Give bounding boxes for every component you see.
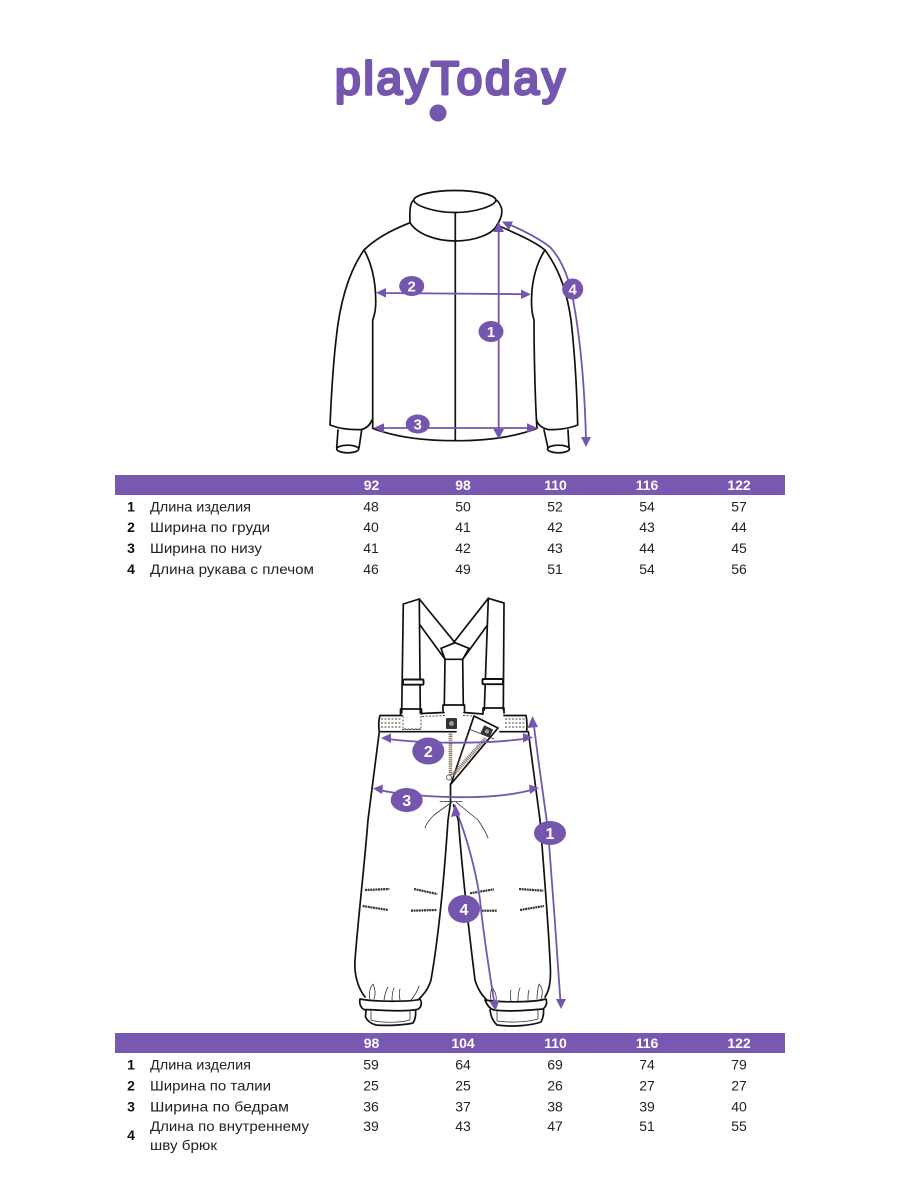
measure 2: waist width: 2: [424, 744, 433, 761]
trousers measurement arrows: [373, 716, 566, 1011]
row 2: Ширина по талии: [150, 1078, 271, 1094]
row 3: [127, 1098, 747, 1114]
row 1: Длина изделия: [150, 1056, 251, 1072]
row 1: 79: [731, 1056, 747, 1072]
row 1: Длина изделия: [150, 498, 251, 514]
measure 3: hip width: [373, 784, 539, 812]
table header: [115, 475, 785, 495]
trouser cuffs: [360, 984, 547, 1026]
row 3: 43: [547, 540, 563, 556]
table: trousers sizes: [115, 1033, 785, 1153]
logo: playToday: playToday: [335, 52, 565, 104]
knee darts: [363, 889, 544, 911]
row 2: 25: [363, 1078, 379, 1094]
row 2: 27: [639, 1078, 655, 1094]
measure 1: garment length: [478, 222, 504, 439]
row 1: 1: [127, 498, 135, 514]
row 4: 39: [363, 1118, 379, 1134]
row 3: 45: [731, 540, 747, 556]
row 3: Ширина по низу: [150, 540, 262, 556]
measure 3: hem width: [374, 414, 538, 434]
zipper and fly: [446, 716, 498, 784]
row 2: 41: [455, 519, 471, 535]
row 1: 54: [639, 498, 655, 514]
row 1: 69: [547, 1056, 563, 1072]
row 4: [127, 1118, 747, 1153]
row 4: 46: [363, 561, 379, 577]
row 4: 43: [455, 1118, 471, 1134]
row 3: 39: [639, 1098, 655, 1114]
row 2: 42: [547, 519, 563, 535]
row 2: 43: [639, 519, 655, 535]
row 3: 36: [363, 1098, 379, 1114]
row 1: 50: [455, 498, 471, 514]
row 1: 74: [639, 1056, 655, 1072]
row 2: 2: [127, 1078, 135, 1094]
table header: 116: [636, 477, 659, 493]
row 1: [127, 498, 747, 514]
table header: 110: [544, 1035, 567, 1051]
table header: 98: [455, 477, 471, 493]
suspenders: [400, 598, 504, 714]
row 3: 40: [731, 1098, 747, 1114]
measure 4: inseam: [448, 804, 500, 1011]
row 2: 26: [547, 1078, 563, 1094]
measure 4: sleeve length: 4: [569, 282, 578, 298]
row 1: 57: [731, 498, 747, 514]
measure 4: inseam: 4: [460, 902, 469, 919]
row 4: 56: [731, 561, 747, 577]
row 4: шву брюк: [150, 1137, 218, 1153]
row 4: 4: [127, 1127, 135, 1143]
waistband: [379, 712, 527, 732]
table header: 116: [636, 1035, 659, 1051]
row 3: 41: [363, 540, 379, 556]
row 4: [127, 561, 747, 577]
row 3: 38: [547, 1098, 563, 1114]
measure 4: sleeve length: [502, 222, 591, 447]
row 1: 48: [363, 498, 379, 514]
row 2: [127, 1078, 747, 1094]
trouser legs: [355, 732, 550, 1000]
measure 2: chest width: 2: [408, 278, 416, 296]
measure 3: hem width: 3: [414, 416, 422, 434]
table header: 104: [451, 1035, 475, 1051]
row 3: 3: [127, 540, 135, 556]
row 1: 59: [363, 1056, 379, 1072]
row 3: 44: [639, 540, 655, 556]
row 2: 27: [731, 1078, 747, 1094]
row 4: 49: [455, 561, 471, 577]
row 3: Ширина по бедрам: [150, 1098, 289, 1114]
table header: [115, 1033, 785, 1053]
table header: 98: [364, 1035, 379, 1051]
measure 1: garment length: 1: [546, 826, 555, 843]
row 3: 37: [455, 1098, 471, 1114]
row 3: 42: [455, 540, 471, 556]
row 2: 44: [731, 519, 747, 535]
measure 2: chest width: [376, 276, 531, 299]
row 4: 54: [639, 561, 655, 577]
jacket measurement arrows: [374, 222, 591, 447]
row 1: [127, 1056, 747, 1072]
measure 3: hip width: 3: [402, 793, 411, 810]
table: jacket sizes: [115, 475, 785, 577]
row 4: Длина рукава с плечом: [150, 561, 314, 577]
row 4: 51: [639, 1118, 655, 1134]
jacket illustration: [330, 190, 578, 453]
row 3: [127, 540, 747, 556]
table header: 122: [727, 1035, 751, 1051]
row 2: 25: [455, 1078, 471, 1094]
row 1: 64: [455, 1056, 471, 1072]
measure 1: garment length: [528, 716, 566, 1009]
row 4: 47: [547, 1118, 563, 1134]
row 4: 4: [127, 561, 135, 577]
measure 1: garment length: 1: [487, 324, 495, 341]
row 4: 51: [547, 561, 563, 577]
row 4: Длина по внутреннему: [150, 1118, 309, 1134]
table header: 122: [727, 477, 751, 493]
row 1: 1: [127, 1056, 135, 1072]
row 2: 2: [127, 519, 135, 535]
row 2: [127, 519, 747, 535]
table header: 110: [544, 477, 567, 493]
row 1: 52: [547, 498, 563, 514]
measure 2: waist width: [381, 733, 533, 764]
row 3: 3: [127, 1098, 135, 1114]
row 2: Ширина по груди: [150, 519, 270, 535]
row 2: 40: [363, 519, 379, 535]
row 4: 55: [731, 1118, 747, 1134]
table header: 92: [364, 477, 379, 493]
trousers illustration: [355, 598, 550, 1026]
